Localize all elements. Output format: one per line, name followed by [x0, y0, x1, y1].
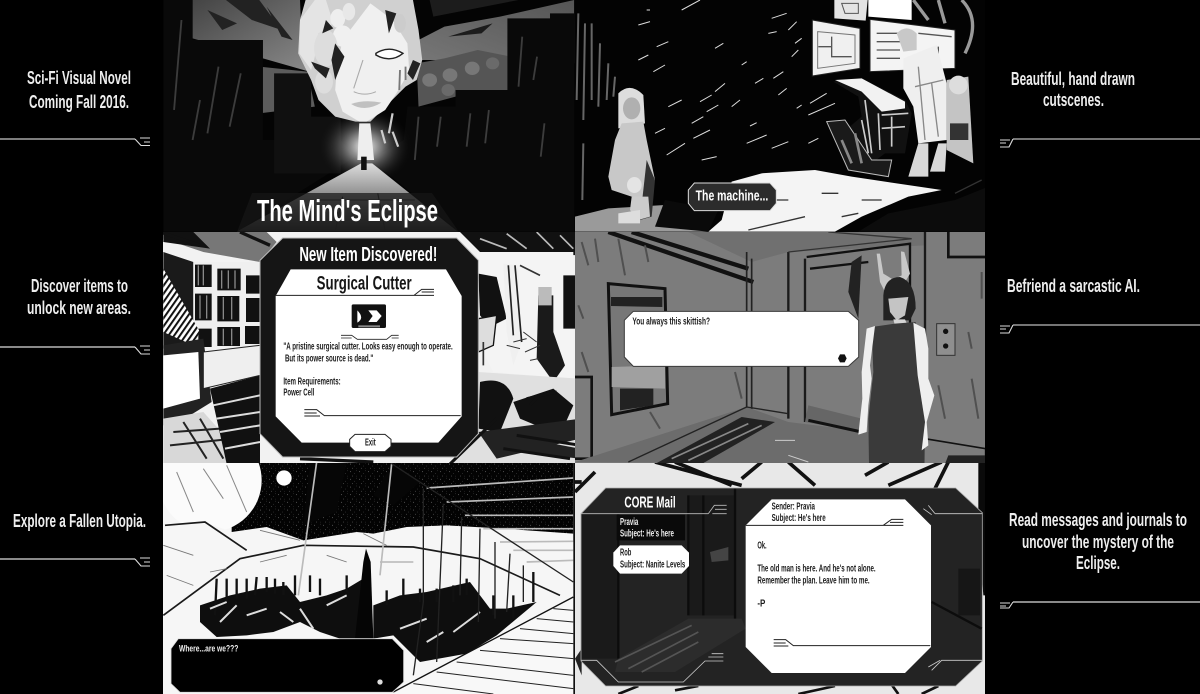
panel: title art	[163, 0, 575, 232]
item dialog	[260, 238, 478, 457]
AI character	[858, 251, 934, 464]
city	[200, 579, 363, 639]
starry sky	[232, 462, 573, 542]
mail item: Rob: Subject: Nanite Levels	[620, 559, 685, 570]
lit floor	[708, 170, 942, 232]
mail item: Rob	[613, 545, 689, 574]
item dialog: Item Requirements:	[283, 376, 341, 387]
message sheet: -P	[757, 598, 765, 609]
dialog: the machine: The machine...	[696, 189, 768, 205]
title: The Mind's Eclipse	[257, 193, 438, 228]
message sheet	[746, 499, 931, 673]
doctor figure	[897, 28, 917, 52]
heading: New Item Discovered!	[299, 244, 437, 266]
selected mail: Pravia: Subject: He's here	[620, 529, 674, 540]
message sheet: The old man is here. And he's not alone.	[757, 564, 876, 575]
left caption: sci-fi visual novel: Coming Fall 2016.	[29, 91, 129, 112]
icon: surgical cutter	[352, 304, 386, 328]
left caption: discover items: unlock new areas.	[27, 297, 131, 318]
machine	[833, 78, 912, 163]
item description: "A pristine surgical cutter. Looks easy enough to operate.	[283, 342, 453, 353]
item name: Surgical Cutter	[317, 273, 412, 294]
message sheet: Subject: He's here	[772, 513, 826, 524]
child figure	[618, 88, 645, 128]
exit button	[350, 434, 391, 452]
panel: fallen utopia scene	[163, 463, 575, 694]
heading: CORE Mail: CORE Mail	[624, 495, 676, 512]
item dialog: But its power source is dead."	[285, 353, 373, 364]
room background	[688, 232, 925, 262]
dialog: where are we: Where...are we???	[179, 643, 239, 653]
ringed planet	[232, 463, 262, 528]
message sheet: Sender: Pravia	[772, 501, 815, 512]
panel: sarcastic AI scene	[575, 232, 995, 464]
speech bubble	[624, 311, 859, 366]
mountains	[232, 525, 574, 542]
right caption: messages and journals	[1000, 509, 1200, 608]
monitors	[868, 0, 912, 20]
corridor background	[163, 232, 277, 262]
mail window	[581, 488, 982, 686]
left caption: explore a fallen utopia	[0, 510, 150, 566]
dialog: where are we	[171, 639, 404, 692]
right caption: messages and journals: Eclipse.	[1076, 552, 1120, 573]
right caption: hand drawn cutscenes: Beautiful, hand drawn	[1011, 68, 1135, 89]
icon: giant face with hair of heads	[298, 0, 422, 122]
selected mail: Pravia: Pravia	[620, 517, 638, 528]
left caption: discover items	[0, 275, 150, 354]
panel: CORE Mail scene	[575, 462, 995, 694]
speech bubble: You always this skittish?	[632, 316, 710, 327]
moon	[276, 470, 292, 486]
left caption: sci-fi visual novel	[0, 67, 150, 146]
exit button: Exit	[365, 437, 376, 448]
message sheet: Ok.	[757, 541, 767, 552]
item dialog: Power Cell	[283, 388, 314, 399]
walkway floor	[393, 597, 573, 694]
right caption: sarcastic AI	[1000, 275, 1200, 333]
panel: item discovery scene	[160, 232, 580, 464]
dialog: the machine	[688, 183, 776, 211]
rain streaks	[638, 0, 835, 160]
mail item: Rob: Rob	[620, 548, 631, 559]
selected mail: Pravia	[617, 515, 685, 540]
corridor background	[575, 462, 948, 492]
title band	[237, 193, 459, 232]
panel: hand drawn cutscene	[575, 0, 988, 232]
right caption: hand drawn cutscenes	[1000, 68, 1200, 147]
right caption: hand drawn cutscenes: cutscenes.	[1043, 89, 1104, 110]
message sheet: Remember the plan. Leave him to me.	[757, 575, 870, 586]
background city and sky	[164, 0, 574, 231]
left caption: sci-fi visual novel: Sci-Fi Visual Novel	[27, 67, 131, 88]
left caption: discover items: Discover items to	[31, 275, 128, 296]
glass walkway frame	[298, 462, 573, 595]
left caption: explore a fallen utopia: Explore a Fallen Utopia.	[13, 510, 146, 531]
